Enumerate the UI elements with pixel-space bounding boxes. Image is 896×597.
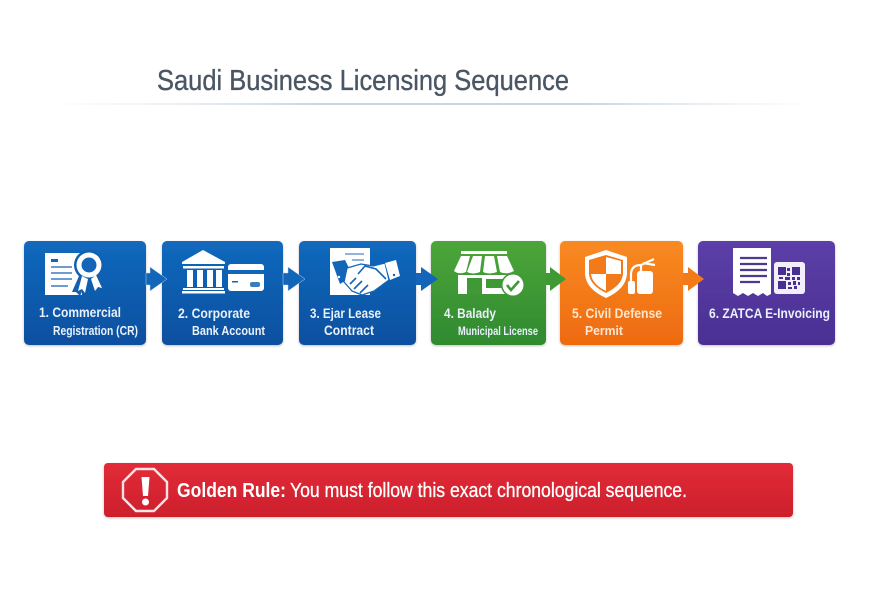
icon: receipt and qr code — [733, 248, 805, 296]
label: civil defense permit: 5. Civil Defense — [572, 305, 662, 321]
label: commercial registration: 1. Commercial — [39, 304, 121, 320]
panel: step 6 zatca e-invoicing — [698, 241, 835, 345]
label: civil defense permit — [572, 305, 662, 338]
label: corporate bank account — [178, 305, 266, 338]
label: ejar lease contract — [310, 305, 381, 338]
icon: warning octagon — [123, 469, 167, 511]
text: golden rule: You must follow this exact chronological sequence. — [290, 480, 687, 502]
icon: contract and handshake — [330, 248, 400, 295]
label: balady municipal license: Municipal License — [458, 324, 538, 338]
panel: step 1 commercial registration — [24, 241, 146, 345]
arrow: step 1 to 2 — [146, 267, 167, 291]
label: corporate bank account: Bank Account — [192, 323, 266, 338]
icon: storefront with check — [454, 251, 525, 297]
label: balady municipal license: 4. Balady — [444, 305, 496, 321]
icon: shield and extinguisher — [585, 250, 655, 298]
label: corporate bank account: 2. Corporate — [178, 305, 250, 321]
text: golden rule: Golden Rule: — [177, 480, 286, 502]
arrow: step 3 to 4 — [416, 267, 438, 291]
arrow: step 5 to 6 — [683, 267, 704, 291]
arrow: step 2 to 3 — [283, 267, 305, 291]
label: commercial registration — [39, 304, 138, 338]
label: balady municipal license — [444, 305, 538, 338]
label: civil defense permit: Permit — [585, 323, 624, 338]
label: zatca e-invoicing: 6. ZATCA E-Invoicing — [709, 305, 830, 321]
icon: certificate with seal — [45, 250, 104, 296]
label: ejar lease contract: 3. Ejar Lease — [310, 305, 381, 321]
callout: golden rule banner — [104, 463, 793, 517]
title: Saudi Business Licensing Sequence — [157, 65, 569, 97]
panel: step 3 ejar lease contract — [299, 241, 416, 345]
panel: step 5 civil defense permit — [560, 241, 683, 345]
icon: bank and card — [182, 250, 264, 294]
arrow: step 4 to 5 — [546, 267, 566, 291]
panel: step 2 corporate bank account — [162, 241, 283, 345]
label: commercial registration: Registration (CR) — [53, 323, 138, 338]
panel: step 4 balady municipal license — [431, 241, 546, 345]
label: ejar lease contract: Contract — [324, 322, 374, 338]
